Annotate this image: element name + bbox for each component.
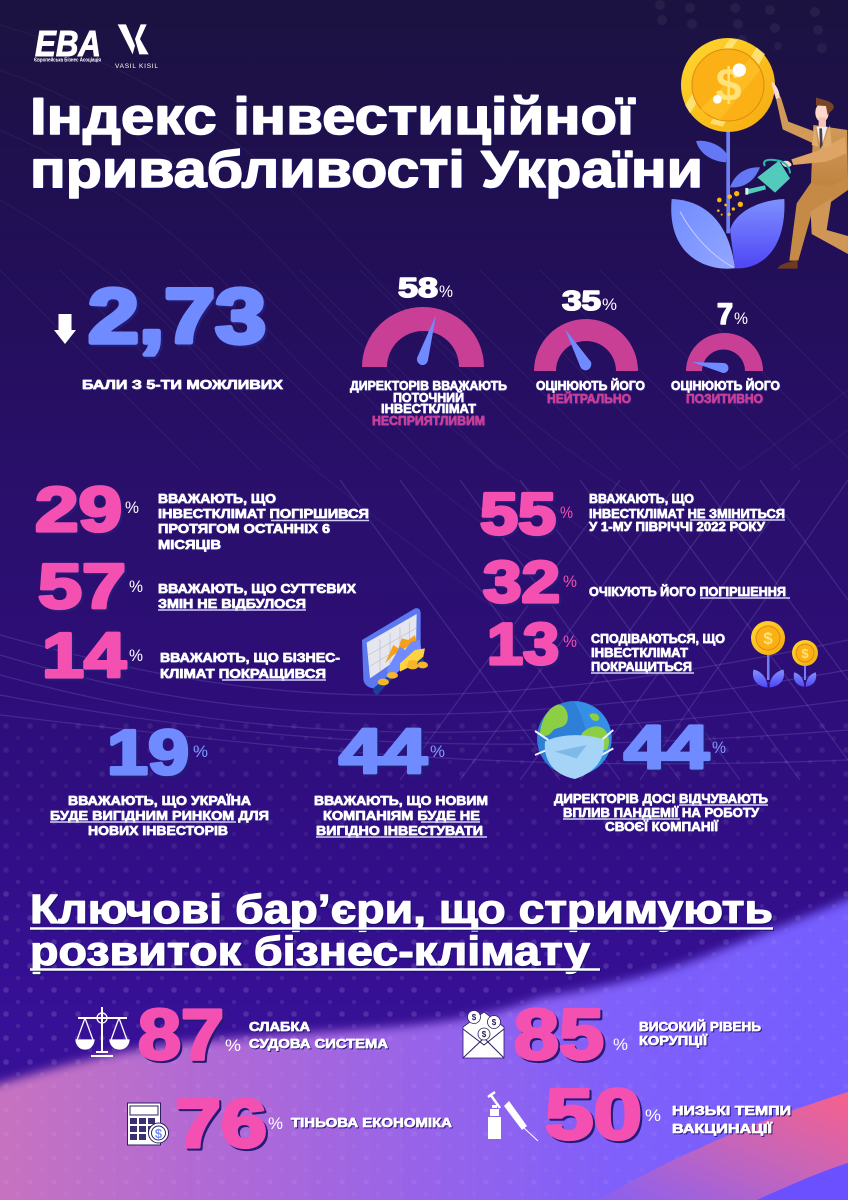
- stat: 55%: У 1-МУ ПІВРІЧЧІ 2022 РОКУ: [589, 520, 765, 534]
- stat: 57%: ВВАЖАЮТЬ, ЩО СУТТЄВИХ: [158, 582, 357, 596]
- gauge: 35%: [534, 285, 645, 406]
- stat: 29%: 29: [35, 475, 122, 545]
- stat: 14%: КЛІМАТ ПОКРАЩИВСЯ: [160, 667, 326, 681]
- stat: 32%: [483, 550, 790, 615]
- gauge: 58%: %: [439, 282, 453, 301]
- gauge: 58%: НЕСПРИЯТЛИВИМ: [372, 414, 485, 428]
- stat: 87%: СУДОВА СИСТЕМА: [249, 1037, 388, 1051]
- icon: watering can: [745, 160, 790, 195]
- gauge: 35%: 35: [562, 285, 601, 316]
- stat: 55%: ВВАЖАЮТЬ, ЩО: [589, 492, 694, 506]
- icon: globe with mask: [535, 701, 613, 779]
- icon: two coin plants: [751, 621, 818, 688]
- stat: 44% pandemic: СВОЄЇ КОМПАНІЇ: [605, 819, 719, 834]
- icon: gold coin: [681, 38, 775, 132]
- gauge: 58%: ДИРЕКТОРІВ ВВАЖАЮТЬ: [350, 379, 507, 393]
- stat: 29%: ВВАЖАЮТЬ, ЩО: [158, 492, 276, 506]
- stat: 50%: ВАКЦИНАЦІЇ: [672, 1121, 773, 1136]
- stat: 55%: 55: [480, 482, 556, 547]
- stat: 19%: БУДЕ ВИГІДНИМ РИНКОМ ДЛЯ: [50, 809, 269, 823]
- stat: 44% new companies: ВИГІДНО ІНВЕСТУВАТИ: [316, 824, 483, 838]
- stat: 13%: ПОКРАЩИТЬСЯ: [591, 660, 692, 674]
- stat: 87%: [138, 996, 388, 1075]
- stat: 19%: НОВИХ ІНВЕСТОРІВ: [88, 824, 228, 838]
- stat: 85%: ВИСОКИЙ РІВЕНЬ: [639, 1019, 761, 1034]
- stat: 57%: ЗМІН НЕ ВІДБУЛОСЯ: [158, 597, 306, 611]
- heading: barriers: розвиток бізнес-клімату: [30, 928, 590, 974]
- stat: 2,73: 2,73: [88, 274, 266, 360]
- stat: 29%: [35, 475, 369, 552]
- stat: 29%: %: [125, 498, 139, 517]
- icon: businessman: [772, 82, 848, 269]
- stat: 14%: 14: [42, 621, 126, 691]
- stat: 13%: ІНВЕСТКЛІМАТ: [591, 646, 688, 660]
- gauge: 7%: ПОЗИТИВНО: [686, 392, 763, 406]
- stat: 44% pandemic: 44: [624, 713, 709, 781]
- stat: 87%: %: [225, 1036, 241, 1055]
- icon: two coin plants: $: [801, 646, 809, 661]
- title: Індекс інвестиційної: [30, 88, 636, 146]
- heading: barriers: Ключові бар’єри, що стримують: [30, 886, 773, 932]
- stat: 14%: %: [129, 646, 143, 665]
- stat: 14%: ВВАЖАЮТЬ, ЩО БІЗНЕС-: [160, 651, 340, 665]
- icon: chart monitor: [362, 608, 428, 695]
- stat: 44% new companies: %: [430, 742, 445, 761]
- label: score: БАЛИ З 5-ТИ МОЖЛИВИХ: [82, 378, 284, 392]
- stat: 85%: КОРУПЦІЇ: [639, 1033, 708, 1048]
- stat: 50%: [545, 1076, 791, 1155]
- title: [30, 88, 703, 199]
- stat: 13%: %: [563, 632, 577, 651]
- gauge: 35%: ОЦІНЮЮТЬ ЙОГО: [536, 378, 645, 393]
- stat: 55%: [480, 482, 785, 547]
- gauge: 58%: [350, 272, 507, 428]
- icon: gold coin: $: [716, 59, 742, 111]
- stat: 87%: СЛАБКА: [249, 1020, 310, 1034]
- stat: 44% pandemic: [554, 713, 768, 834]
- icon: envelope with coins: [463, 1010, 504, 1058]
- gauge: 7%: 7: [717, 298, 733, 331]
- stat: 32%: %: [563, 572, 577, 591]
- stat: 85%: %: [613, 1035, 628, 1054]
- gauge: 58%: ІНВЕСТКЛІМАТ: [381, 402, 476, 416]
- stat: 76%: [175, 1085, 452, 1162]
- stat: 76%: ТІНЬОВА ЕКОНОМІКА: [291, 1116, 452, 1130]
- logo: Vasil Kisil: VASIL KISIL: [115, 63, 158, 70]
- stat: 50%: НИЗЬКІ ТЕМПИ: [672, 1104, 791, 1118]
- stat: 87%: 87: [138, 996, 224, 1075]
- logo: EBA: EBA: [35, 23, 101, 64]
- stat: 44% new companies: КОМПАНІЯМ БУДЕ НЕ: [323, 809, 480, 823]
- stat: 19%: 19: [107, 718, 189, 788]
- icon: scales: [76, 1007, 129, 1056]
- gauge: 35%: НЕЙТРАЛЬНО: [547, 391, 631, 406]
- stat: 55%: %: [560, 503, 573, 522]
- icon: calculator: $: [155, 1126, 163, 1141]
- stat: 19%: ВВАЖАЮТЬ, ЩО УКРАЇНА: [68, 793, 251, 808]
- stat: 29%: ІНВЕСТКЛІМАТ ПОГІРШИВСЯ: [158, 507, 369, 521]
- stat: 55%: ІНВЕСТКЛІМАТ НЕ ЗМІНИТЬСЯ: [589, 507, 785, 521]
- stat: 14%: [42, 621, 340, 691]
- stat: 19%: [50, 718, 269, 838]
- stat: 29%: ПРОТЯГОМ ОСТАННІХ 6: [158, 522, 330, 536]
- stat: 50%: 50: [545, 1076, 642, 1155]
- stat: 44% new companies: ВВАЖАЮТЬ, ЩО НОВИМ: [314, 794, 488, 808]
- icon: big leaves: [671, 199, 784, 269]
- stat: 57%: %: [129, 577, 143, 596]
- heading: barriers: [30, 886, 773, 974]
- stat: 44% new companies: [314, 717, 488, 838]
- icon: syringe and vial: [488, 1092, 538, 1141]
- stat: 57%: 57: [38, 552, 126, 622]
- stat: 13%: 13: [487, 612, 559, 677]
- stat: 44% new companies: 44: [339, 717, 427, 787]
- stat: 50%: %: [645, 1106, 661, 1125]
- stat: 32%: ОЧІКУЮТЬ ЙОГО ПОГІРШЕННЯ: [589, 584, 786, 599]
- icon: two coin plants: $: [763, 629, 773, 648]
- icon: envelope with coins: $: [492, 1018, 497, 1027]
- stat: 57%: [38, 552, 357, 622]
- stat: 44% pandemic: %: [712, 738, 726, 757]
- icon: envelope with coins: $: [482, 1030, 487, 1039]
- stat: 32%: 32: [483, 550, 560, 615]
- icon: water drops: [717, 191, 743, 216]
- stat: 44% pandemic: ВПЛИВ ПАНДЕМІЇ НА РОБОТУ: [563, 805, 759, 820]
- stat: 85%: [514, 996, 761, 1075]
- stat: 13%: СПОДІВАЮТЬСЯ, ЩО: [591, 632, 725, 646]
- gauge: 7%: %: [734, 309, 748, 328]
- stat: 85%: 85: [514, 996, 604, 1075]
- stat: 19%: %: [193, 742, 208, 761]
- arrow: down: [54, 314, 76, 344]
- stat: 76%: %: [268, 1114, 283, 1133]
- icon: envelope with coins: $: [472, 1013, 477, 1022]
- illustration: man watering coin plant: [671, 38, 848, 269]
- gauge: 7%: [671, 298, 780, 406]
- icon: calculator: [128, 1103, 168, 1145]
- stat: 76%: 76: [175, 1085, 267, 1162]
- title: привабливості України: [30, 141, 703, 199]
- stat: 13%: [487, 612, 725, 677]
- gauge: 58%: 58: [398, 272, 438, 303]
- icon: small leaves: [696, 141, 760, 187]
- stat: 29%: МІСЯЦІВ: [158, 538, 221, 552]
- gauge: 35%: %: [602, 295, 617, 314]
- gauge: 58%: ПОТОЧНИЙ: [393, 390, 464, 405]
- stat: 44% pandemic: ДИРЕКТОРІВ ДОСІ ВІДЧУВАЮТЬ: [554, 792, 768, 806]
- logo: Vasil Kisil: [115, 24, 158, 70]
- gauge: 7%: ОЦІНЮЮТЬ ЙОГО: [671, 378, 780, 393]
- logo: EBA: Європейська Бізнес Асоціація: [34, 56, 101, 64]
- icon: plant stem: [726, 130, 730, 233]
